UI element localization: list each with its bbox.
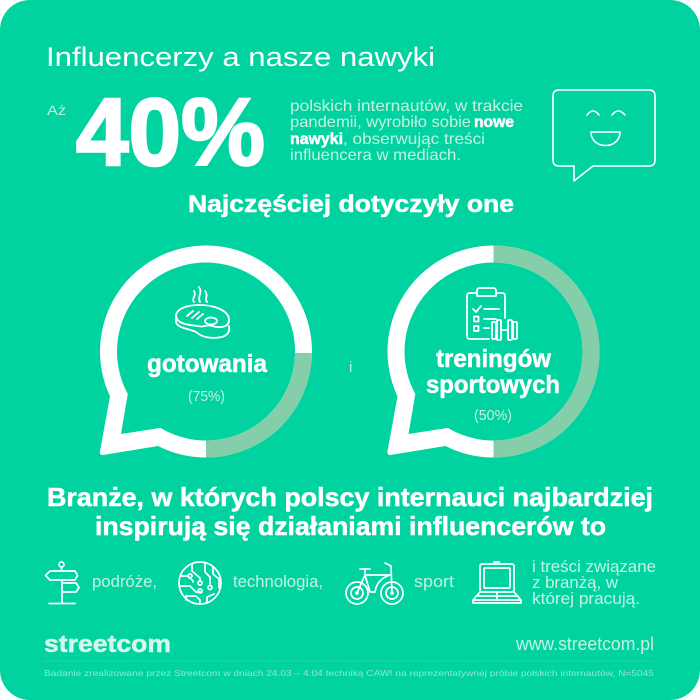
closing text — [532, 558, 656, 608]
panel: training bubble 50% — [387, 246, 600, 458]
label: gotowania: gotowania — [147, 350, 268, 378]
icon: signpost — [46, 562, 79, 604]
label: technologia: technologia, — [233, 573, 323, 591]
intro paragraph: pandemii, wyrobiło sobie — [290, 114, 471, 131]
icon: smiling speech bubble — [553, 90, 655, 181]
label: sport: sport — [414, 573, 454, 591]
panel: cooking bubble 75% — [100, 246, 312, 458]
intro paragraph: nowe — [474, 114, 514, 131]
bubble ring — [100, 246, 312, 458]
connector word: i: i — [349, 359, 352, 376]
icon: clipboard and dumbbell — [467, 288, 517, 340]
value: 75%: (75%) — [188, 389, 225, 405]
intro paragraph: , obserwując treści — [343, 131, 485, 148]
closing text: której pracują. — [532, 590, 640, 608]
intro paragraph: polskich internautów, w trakcie — [290, 98, 523, 115]
icon: circuit — [179, 562, 221, 604]
remaining share arc — [494, 254, 591, 449]
label: treningów sportowych: treningów — [436, 345, 552, 373]
intro paragraph — [290, 98, 523, 164]
subheading: Najczęściej dotyczyły one — [188, 191, 514, 218]
closing text: z branżą, w — [532, 574, 618, 592]
big number 40%: 40% — [76, 79, 265, 186]
intro paragraph: influencera w mediach. — [290, 147, 461, 164]
icon: bicycle — [346, 563, 403, 604]
label: treningów sportowych: sportowych — [426, 371, 560, 399]
label: podróże: podróże, — [92, 573, 157, 591]
icon: steak — [176, 287, 229, 338]
label: treningów sportowych — [426, 345, 560, 399]
label: Aż: Aż — [47, 102, 66, 118]
section heading: inspirują się działaniami influencerów to — [95, 511, 606, 541]
remaining share arc — [206, 353, 304, 449]
section heading — [47, 482, 653, 541]
footnote: Badanie zrealizowane przez Streetcom w dniach 24.03 – 4.04 techniką CAWI na reprezentatywnej próbie polskich internautów, N=5045 — [44, 668, 654, 678]
website: www.streetcom.pl — [515, 634, 654, 654]
logo: streetcom: streetcom — [44, 631, 171, 658]
title: Influencerzy a nasze nawyki — [46, 42, 435, 72]
section heading: Branże, w których polscy internauci najbardziej — [47, 482, 653, 512]
bubble ring — [387, 246, 600, 458]
intro paragraph: nawyki — [290, 131, 343, 148]
icon: laptop — [473, 562, 521, 603]
closing text: i treści związane — [532, 558, 656, 576]
value: 50%: (50%) — [474, 408, 512, 424]
